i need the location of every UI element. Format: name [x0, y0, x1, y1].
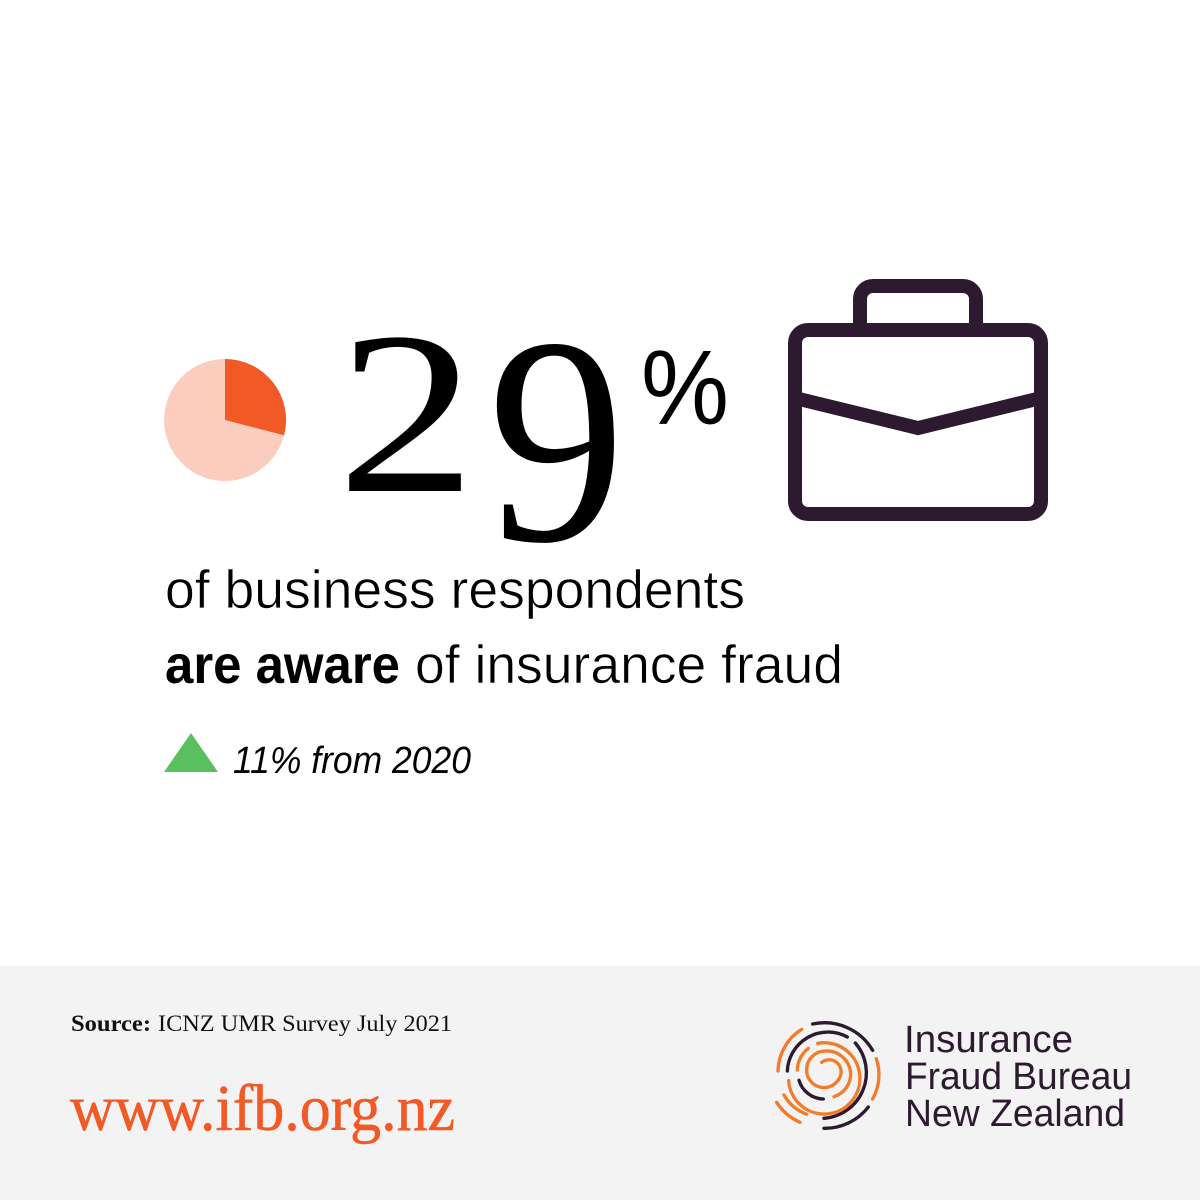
big number: 29%: 9	[488, 277, 625, 604]
footer panel	[0, 966, 1200, 1200]
logo: wordmark	[904, 1019, 1132, 1135]
big number: 29%	[337, 277, 729, 604]
statement text: of business respondents	[165, 560, 745, 620]
source line: ICNZ UMR Survey July 2021	[158, 1011, 452, 1036]
pie chart: 29%	[164, 359, 286, 481]
source line: Source:	[71, 1011, 151, 1036]
big number: 29%: %	[641, 329, 729, 447]
statement text	[165, 560, 843, 695]
statement text: of insurance fraud	[415, 635, 843, 695]
icon: briefcase	[795, 286, 1041, 514]
trend indicator: up 11% from 2020: 11% from 2020	[233, 740, 471, 782]
logo: wordmark: Fraud Bureau	[905, 1056, 1132, 1098]
statement text: are aware	[165, 635, 400, 695]
logo: spiral mark	[777, 1023, 879, 1128]
website url: www.ifb.org.nz	[70, 1072, 455, 1145]
big number: 29%: 2	[337, 285, 476, 542]
trend indicator: up 11% from 2020	[164, 733, 471, 782]
logo: wordmark: Insurance	[904, 1019, 1073, 1061]
logo: wordmark: New Zealand	[905, 1093, 1125, 1135]
